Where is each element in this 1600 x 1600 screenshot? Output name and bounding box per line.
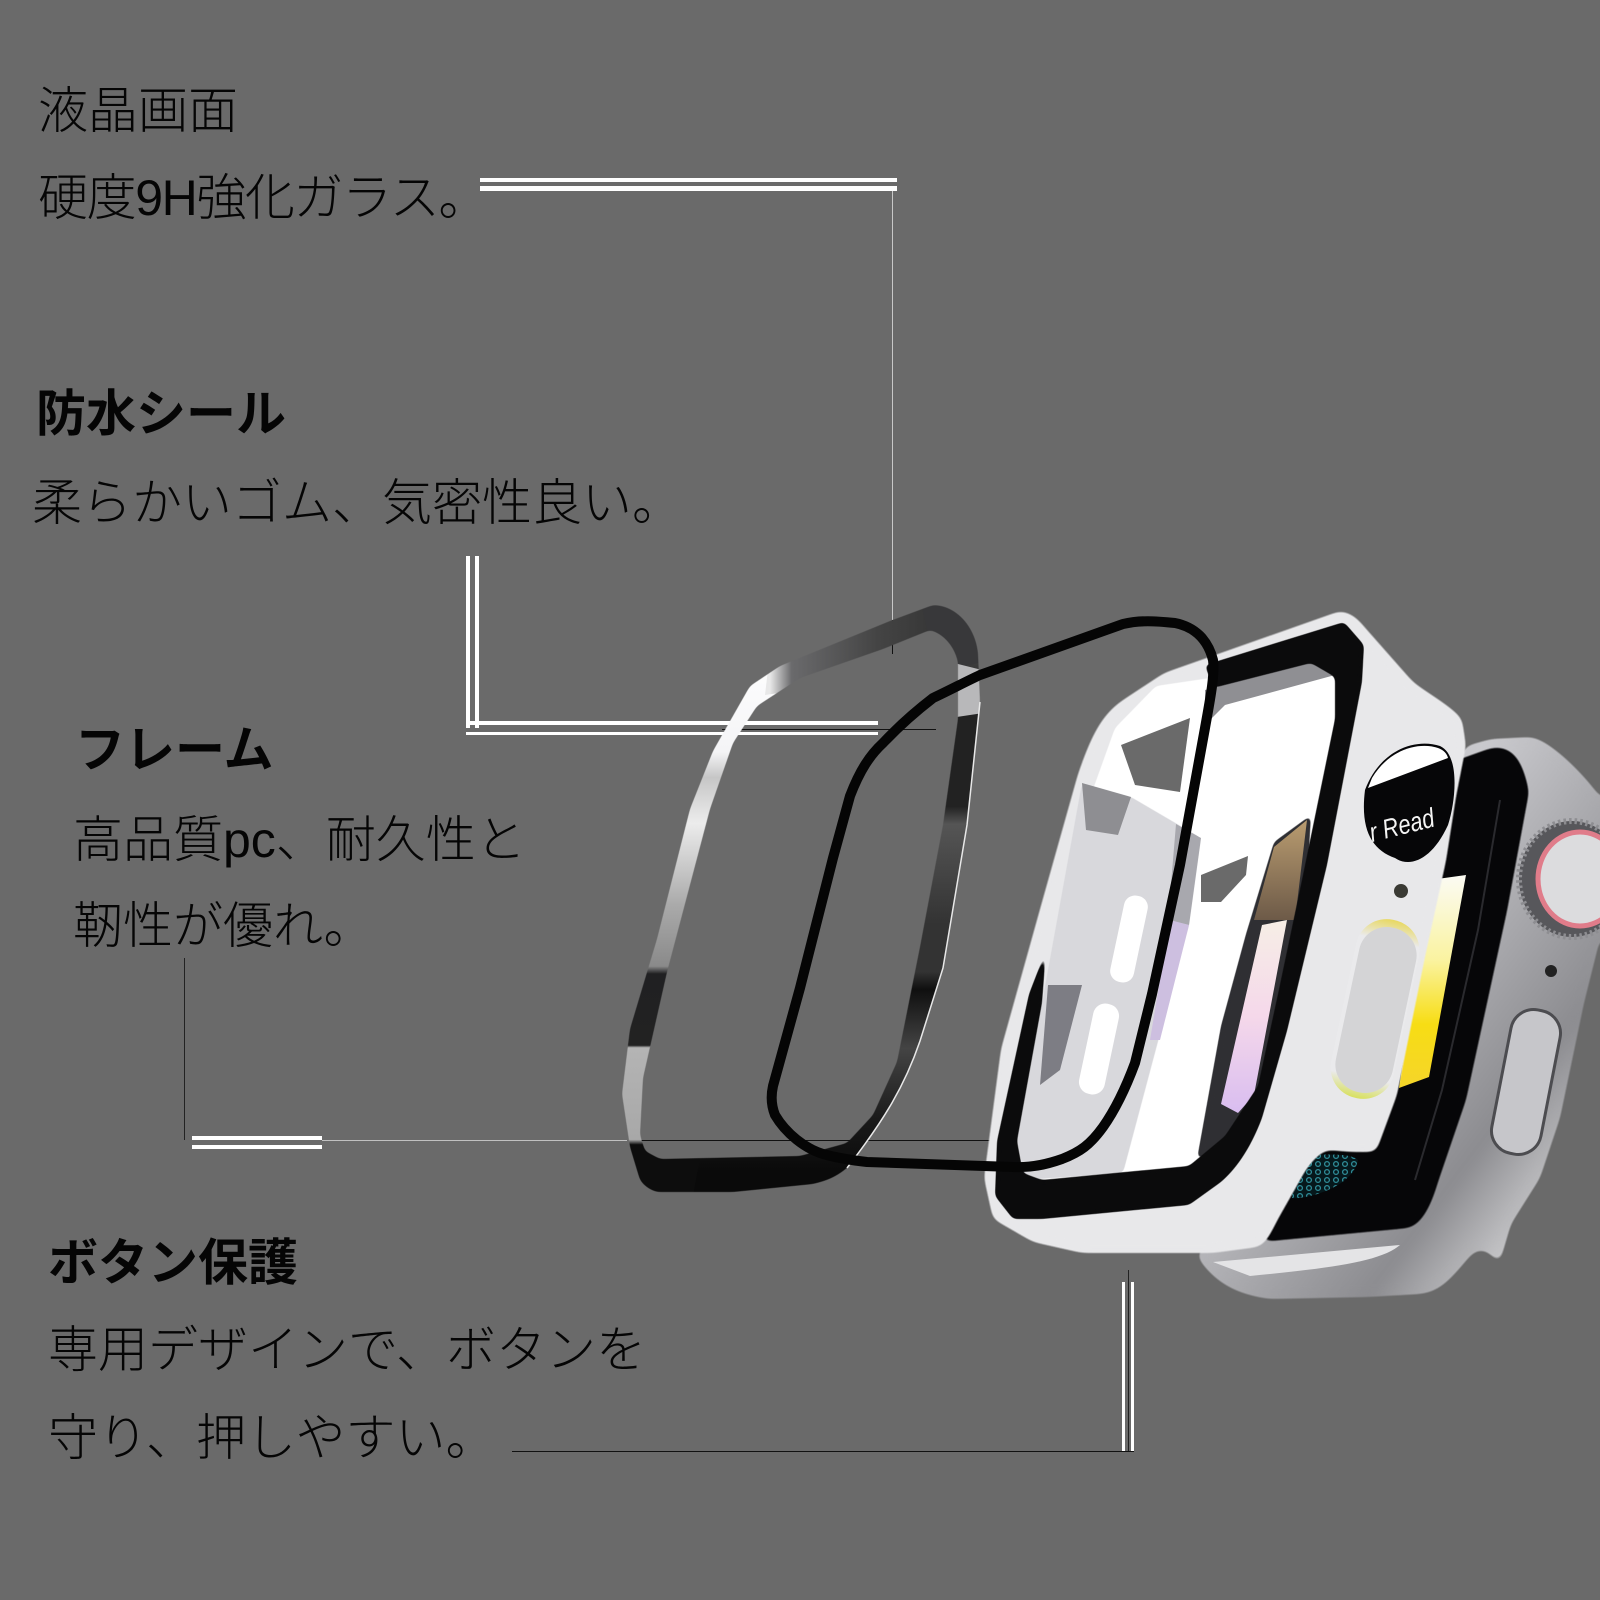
- case button cover: [1330, 922, 1422, 1098]
- leader line: frame: [184, 958, 1026, 1149]
- watch body: [1197, 737, 1600, 1299]
- rubber seal: [772, 621, 1213, 1167]
- glass opening: [1017, 663, 1335, 1180]
- case shell: [984, 611, 1466, 1253]
- leader line: waterproof seal: [466, 556, 936, 735]
- inner wall left: [1017, 783, 1201, 1180]
- text: liquid crystal screen: 液晶画面: [38, 83, 238, 139]
- top band reflection: [1205, 660, 1335, 725]
- text: frame: 高品質pc、耐久性と: [73, 812, 526, 868]
- lug slots: [1077, 1001, 1121, 1097]
- label: watch screen text: r Read: [1366, 803, 1438, 848]
- text: waterproof seal: 柔らかいゴム、気密性良い。: [32, 475, 682, 531]
- screen inner edge: [1415, 800, 1500, 1180]
- text: liquid crystal screen: [38, 83, 487, 226]
- side button: [1488, 1006, 1564, 1158]
- white case: [984, 611, 1466, 1253]
- text: frame: 靭性が優れ。: [73, 898, 374, 954]
- yellow card: [1399, 875, 1466, 1088]
- inner wall dark reflections: [1082, 783, 1131, 835]
- top-right dark corner: [943, 629, 978, 656]
- case button opening: [1325, 913, 1425, 1105]
- left half: [622, 674, 778, 1192]
- top band: [765, 628, 928, 695]
- text: liquid crystal screen: 硬度9H強化ガラス。: [38, 170, 487, 226]
- teal dots: [1292, 1154, 1358, 1198]
- hole highlight: [1368, 746, 1448, 788]
- text: waterproof seal: 防水シール: [36, 386, 286, 442]
- black glass border: [995, 622, 1364, 1219]
- text: frame: [73, 722, 526, 954]
- mic hole: [1394, 884, 1408, 898]
- text: button protection: 守り、押しやすい。: [48, 1410, 496, 1466]
- right half: [694, 663, 979, 1192]
- leader line: liquid crystal screen: [480, 178, 897, 654]
- watch seen through glass: [1197, 815, 1311, 1159]
- text: button protection: 専用デザインで、ボタンを: [48, 1322, 646, 1378]
- text: waterproof seal: [32, 386, 682, 531]
- text: frame: フレーム: [75, 722, 274, 778]
- screen-side sensor hole: [1364, 744, 1455, 862]
- crown: [1519, 821, 1600, 937]
- leader line: button protection: [512, 1270, 1134, 1452]
- right light patch: [958, 664, 980, 717]
- brown reflection: [1254, 820, 1307, 920]
- text: button protection: ボタン保護: [48, 1235, 298, 1291]
- pink screen reflection: [1221, 920, 1287, 1113]
- grey gaps in glass: [1121, 718, 1190, 792]
- watch screen: [1262, 748, 1529, 1242]
- text: button protection: [48, 1235, 646, 1466]
- watch: [1197, 737, 1600, 1299]
- frame ring: [622, 605, 981, 1192]
- lower silver highlight: [1213, 1245, 1400, 1276]
- mic dot: [1545, 965, 1557, 977]
